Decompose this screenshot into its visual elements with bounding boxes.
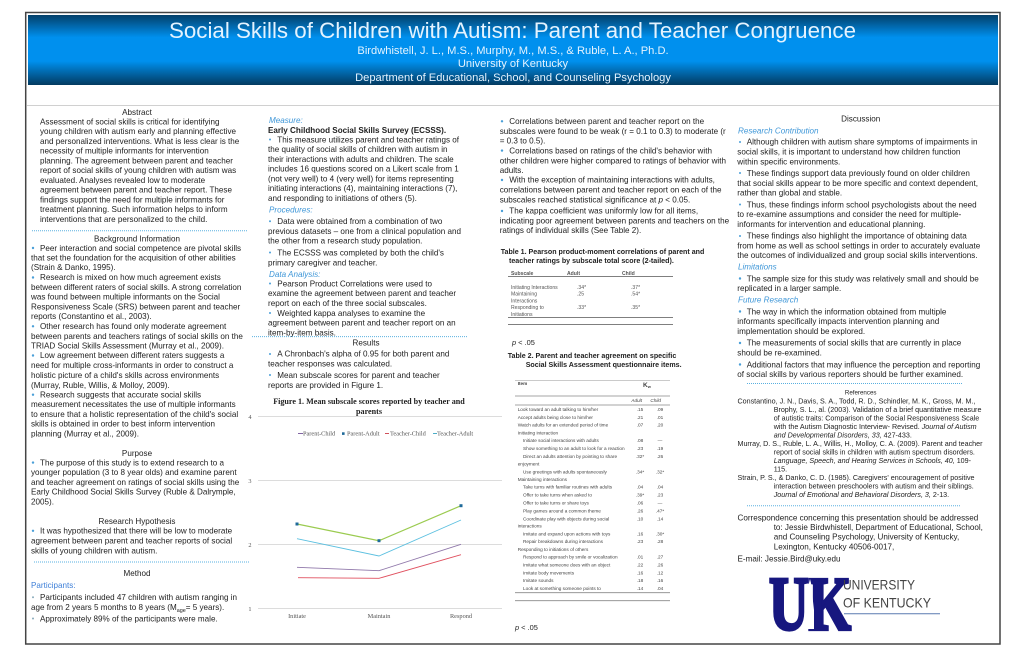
measure name: Early Childhood Social Skills Survey (ECSSS).	[268, 126, 446, 135]
table 2 rows: .19	[657, 446, 664, 451]
results continued: ratings of individual skills (See Table 2).	[500, 226, 641, 235]
hypothesis text: agreement between parent and teacher reports of social	[31, 536, 232, 545]
figure 1 line chart	[248, 397, 502, 620]
table 2 rows: Initiating interaction	[518, 430, 558, 435]
participants text: age from 2 years 5 months to 8 years (M	[31, 603, 177, 612]
table 2 caption	[508, 352, 682, 369]
data analysis text	[268, 279, 456, 337]
logo mark: UK: UK	[769, 563, 851, 647]
reference list: Language, Speech, and Hearing Services in Schools, 40, 109-	[774, 457, 972, 465]
background bullets: between different raters of social skills. A strong correlation	[31, 283, 241, 292]
abstract text: necessity of multiple informants for intervention	[40, 147, 209, 156]
table 2 rows: —	[658, 500, 663, 505]
panel: abstract	[40, 108, 240, 224]
abstract text: planning. The agreement between parent and teacher	[40, 156, 233, 165]
reference list: interaction between preschoolers with autism and their siblings.	[774, 482, 974, 490]
abstract text: and personalized interventions. What is less clear is the	[40, 137, 240, 146]
legend: Teacher-Child	[390, 430, 427, 438]
results continued: The kappa coefficient was uniformly low for all items,	[509, 207, 698, 216]
table 2 rows: Offer to take turns when asked to	[523, 492, 592, 497]
table 2 rows: Look at something someone points to	[523, 586, 601, 591]
table 2 rows: .04	[637, 485, 644, 490]
panel: method	[31, 569, 237, 623]
table 2 rows: Imitate and expand upon actions with toys	[523, 531, 611, 536]
table 2 rows: .23	[637, 446, 644, 451]
table 2: K	[643, 382, 648, 389]
results continued: Correlations based on ratings of the child's behavior with	[509, 146, 712, 155]
logo wordmark: UNIVERSITY	[843, 576, 916, 592]
contribution text: from home as well as school settings in order to accurately evaluate	[737, 241, 981, 250]
future research text: Additional factors that may influence the perception and reporting	[747, 360, 980, 369]
results text: A Chronbach's alpha of 0.95 for both parent and	[277, 350, 449, 359]
reference list: with the Autism Diagnostic Interview- Revised. Journal of Autism	[773, 423, 977, 431]
measure text: their interactions with adults and children. The scale	[268, 155, 454, 164]
table 1: Maintaining	[511, 292, 537, 298]
table 2 rows: .01	[637, 555, 644, 560]
heading: purpose: Purpose	[122, 449, 153, 458]
reference list: Brophy, S. L., al. (2003). Validation of a brief quantitative measure	[774, 406, 981, 414]
subheading: future research: Future Research	[738, 296, 799, 305]
background bullets: between parents and teachers ratings of social skills on the	[31, 332, 243, 341]
table 1: Initiating Interactions	[511, 285, 558, 291]
table 2 rows: interactions	[518, 524, 542, 529]
subheading: research contribution: Research Contribution	[738, 126, 819, 135]
table 2 rows: .47*	[656, 508, 664, 513]
subheading: data analysis: Data Analysis:	[269, 270, 320, 279]
background bullets: need for multiple cross-informants in order to construct a	[31, 361, 234, 370]
table 2 note: p < .05	[514, 623, 538, 632]
purpose text: and teacher agreement on ratings of social skills using the	[31, 478, 240, 487]
panel: correspondence: E-mail: Jessie.Bird@uky.edu	[738, 554, 840, 563]
reference list: Strain, P. S., & Danko, C. D. (1985). Caregivers' encouragement of positive	[738, 474, 975, 482]
table 1: Responding to	[511, 305, 544, 311]
table 2 rows: Look toward an adult talking to him/her	[518, 407, 599, 412]
table 2 rows: .16	[657, 578, 664, 583]
table 2 rows: .26	[657, 563, 664, 568]
results text	[268, 350, 449, 390]
table 1: .37*	[631, 285, 640, 291]
purpose text: The purpose of this study is to extend research to a	[40, 458, 225, 467]
panel: results	[268, 338, 449, 390]
contribution text: to re-examine assumptions and consider the need for multiple-	[737, 210, 962, 219]
table 2 rows	[518, 407, 664, 591]
participants text: Participants included 47 children with autism ranging in	[40, 593, 237, 602]
results continued: adults.	[500, 166, 524, 175]
background bullets: Research is mixed on how much agreement exists	[40, 273, 221, 282]
purpose text: 2005).	[31, 497, 54, 506]
background bullets	[30, 244, 243, 438]
chart title: Figure 1. Mean subscale scores reported by teacher and	[273, 397, 465, 406]
table 1: Child	[622, 271, 635, 277]
contribution text: informants for intervention and educational planning.	[737, 220, 925, 229]
table 2 rows: .26	[637, 508, 644, 513]
background bullets: Other research has found only moderate agreement	[40, 322, 227, 331]
contribution text: the outcomes of individualized and group social skills interventions.	[737, 251, 978, 260]
table 2 rows: Play games around a common theme	[523, 508, 601, 513]
participants text	[31, 593, 237, 623]
future research text: The measurements of social skills that are currently in place	[747, 339, 962, 348]
future research text: informants specifically impacts intervention planning and	[737, 317, 939, 326]
table 2 rows: .34*	[636, 469, 644, 474]
results continued: other children were higher compared to ratings of behavior with	[500, 156, 726, 165]
table 2 rows: .23	[637, 539, 644, 544]
contribution text: that social skills appear to be more specific and context dependent,	[737, 179, 978, 188]
table 2: Item	[518, 381, 527, 386]
participants text: = 5 years).	[186, 603, 224, 612]
table 2 rows: .39*	[636, 492, 644, 497]
background bullets: Research suggests that accurate social skills	[40, 390, 201, 399]
measure text: (not very well) to 4 (very well) for items representing	[268, 174, 454, 183]
table 1: .34*	[577, 285, 586, 291]
panel: background information	[30, 234, 243, 438]
table 2 rows: .32*	[656, 469, 664, 474]
subheading: participants: Participants:	[31, 581, 76, 590]
table 1: .54*	[631, 292, 640, 298]
reference list: Murray, D. S., Ruble, L. A., Willis, H., Molloy, C. A. (2009). Parent and teacher	[738, 440, 983, 448]
panel: correspondence: to: Jessie Birdwhistell, Department of Educational, School,	[774, 523, 983, 532]
table 2 rows: Repair breakdowns during interactions	[523, 539, 604, 544]
subheading: measure: Measure:	[269, 116, 303, 125]
data analysis text: Pearson Product Correlations were used to	[277, 279, 433, 288]
table 2 rows: Take turns with familiar routines with adults	[523, 485, 613, 490]
series: teacher-adult	[297, 520, 461, 556]
header banner	[28, 15, 998, 85]
abstract text: findings support the need for multiple informants for	[40, 195, 225, 204]
data analysis text: Weighted kappa analyses to examine the	[277, 309, 426, 318]
heading: hypothesis: Research Hypothesis	[99, 517, 175, 526]
contribution text: Thus, these findings inform school psychologists about the need	[747, 200, 977, 209]
table 2 rows: Accept adults being close to him/her	[518, 415, 593, 420]
table 2 rows: .22	[637, 563, 644, 568]
table 2 rows: .18	[637, 578, 644, 583]
heading: references: References	[845, 390, 877, 397]
chart title: parents	[356, 407, 382, 416]
results continued: correlations between parent and teacher report on each of the	[500, 185, 722, 194]
subheading: procedures: Procedures:	[269, 206, 313, 215]
limitations text: The sample size for this study was relatively small and should be	[747, 274, 979, 283]
procedures text: the other from a research study population.	[268, 237, 422, 246]
panel: correspondence: and Counseling Psychology, University of Kentucky,	[774, 533, 959, 542]
heading: background: Background Information	[94, 234, 180, 243]
table 1	[501, 248, 704, 347]
background bullets: that set the foundation for the acquisition of other abilities	[31, 254, 236, 262]
table 2 rows: .12	[657, 570, 664, 575]
future research text: The way in which the information obtained from multiple	[747, 307, 947, 316]
data analysis text: examine the agreement between parent and teacher	[268, 289, 456, 298]
series: teacher-child	[298, 555, 461, 578]
table 2 rows: Coordinate play with objects during social	[523, 516, 609, 521]
background bullets: (Strain & Danko, 1995).	[31, 263, 116, 272]
abstract text: treatment planning. Such information helps to inform	[40, 205, 228, 214]
heading: discussion: Discussion	[841, 114, 880, 123]
table 2 rows: .32*	[636, 454, 644, 459]
legend: Teacher-Adult	[437, 430, 473, 438]
table 1: Subscale	[511, 271, 534, 277]
panel: references	[738, 390, 983, 499]
table 2 rows: Responding to initiations of others	[518, 547, 589, 552]
table 2 rows: .23	[657, 492, 664, 497]
background bullets: planning (Murray et al., 2009).	[31, 429, 139, 438]
table 2	[508, 352, 682, 632]
reference list: and Developmental Disorders, 33, 427-433.	[774, 431, 912, 439]
background bullets: Peer interaction and social competence are pivotal skills	[40, 244, 241, 253]
logo wordmark	[843, 576, 932, 610]
y axis labels	[248, 414, 252, 613]
background bullets: Responsiveness Scale (SRS) between parent and teacher	[31, 302, 241, 311]
reference list: of autistic traits: Comparison of the Social Responsiveness Scale	[774, 414, 979, 422]
measure text: includes 16 questions scored on a Likert scale from 1	[268, 165, 459, 174]
table 1: .33*	[577, 305, 586, 311]
table 2 rows: Direct an adults attention by pointing to share	[523, 454, 617, 459]
procedures text: Data were obtained from a combination of two	[277, 217, 443, 226]
background bullets: skills is obtained in order to best inform intervention	[31, 420, 215, 428]
measure text: initiating interactions (4), maintaining interactions (7),	[268, 184, 457, 193]
table 2 rows: Show something to an adult to look for a reaction	[523, 446, 625, 451]
results continued: subscales reached statistical significance at p < 0.05.	[500, 195, 690, 204]
purpose text: Early Childhood Social Skills Survey (Ruble & Dalrymple,	[31, 488, 236, 497]
results continued: subscales were found to be weak (r = 0.1 to 0.3) to moderate (r	[500, 127, 726, 136]
table 2 rows: Initiate social interactions with adults	[523, 438, 599, 443]
background bullets: was found between multiple informants on the Social	[30, 293, 220, 302]
table 2 rows: .27	[657, 555, 664, 560]
reference list: Constantino, J. N., Davis, S. A., Todd, R. D., Schindler, M. K., Gross, M. M.,	[738, 397, 975, 405]
contribution text	[736, 138, 981, 260]
background bullets: reports (Constantino et al., 2003).	[31, 312, 152, 321]
table 1 note: p < .05	[511, 338, 535, 347]
table 2 caption: Social Skills Assessment questionnaire items.	[526, 361, 682, 369]
heading: results: Results	[352, 338, 380, 347]
background bullets: Low agreement between different raters suggests a	[40, 351, 225, 360]
data analysis text: item-by-item basis.	[268, 328, 336, 337]
chart title	[273, 397, 465, 416]
contribution text: within specific environments.	[736, 157, 840, 166]
contribution text: rather than global and stable.	[737, 189, 842, 198]
results continued	[500, 117, 730, 235]
procedures text: previous datasets – one from a clinical population and	[268, 227, 461, 236]
limitations text: replicated in a larger sample.	[737, 284, 841, 293]
data analysis text: report on each of the three social subscales.	[268, 299, 427, 308]
x axis labels: Respond	[450, 613, 473, 620]
table 2 rows: .04	[657, 485, 664, 490]
heading: abstract: Abstract	[122, 108, 153, 117]
table 2 rows: .15	[637, 407, 644, 412]
limitations text	[737, 274, 979, 293]
future research text: of social skills by various reporters should be further examined.	[737, 370, 963, 379]
measure text: This measure utilizes parent and teacher ratings of	[277, 135, 460, 144]
abstract text: young children with autism early and planning effective	[40, 127, 237, 136]
title: Social Skills of Children with Autism: Parent and Teacher Congruence	[169, 18, 856, 43]
table 2 rows: Imitate what someone does with an object	[523, 563, 611, 568]
future research text: implementation should be explored.	[737, 327, 865, 336]
abstract text: report of social skills of young children with autism was	[40, 166, 236, 175]
x axis labels	[288, 613, 473, 620]
panel: measure	[268, 116, 461, 337]
subheading: limitations: Limitations	[738, 263, 777, 272]
contribution text: social skills, it is important to understand how children function	[737, 148, 960, 157]
results text: teacher responses was calculated.	[268, 359, 392, 368]
table 2 rows: .07	[637, 423, 644, 428]
procedures text: The ECSSS was completed by both the child's	[277, 248, 444, 257]
purpose text	[31, 458, 240, 506]
participants text: Approximately 89% of the participants were male.	[40, 614, 218, 623]
results continued: = 0.3 to 0.5).	[500, 137, 545, 146]
table 2: Child	[650, 398, 661, 403]
purpose text: younger population (3 to 8 year olds) and examine parent	[31, 468, 237, 477]
table 2 rows: .20	[657, 423, 664, 428]
data analysis text: agreement between parent and teacher report on an	[268, 319, 456, 328]
y axis labels: 4	[248, 414, 252, 421]
reference list: Journal of Emotional and Behavioral Disorders, 3, 2-13.	[773, 491, 949, 499]
table 2 rows: .16	[637, 570, 644, 575]
table 2 rows: .28	[657, 539, 664, 544]
abstract text: evaluated. Analyses revealed low to moderate	[40, 176, 206, 185]
table 2 rows: Use greetings with adults spontaneously	[523, 469, 608, 474]
results text: reports are provided in Figure 1.	[268, 381, 383, 390]
series: parent-child	[297, 544, 461, 571]
logo: University of Kentucky	[769, 563, 940, 647]
table 1: .35*	[631, 305, 640, 311]
background bullets: TRIAD Social Skills Assessment (Murray et al., 2009).	[31, 342, 224, 350]
department: Department of Educational, School, and Counseling Psychology	[355, 72, 671, 84]
procedures text	[268, 217, 461, 267]
panel: correspondence	[738, 513, 983, 563]
contribution text: Although children with autism share symptoms of impairments in	[747, 138, 977, 147]
table 2 rows: enjoyment	[518, 461, 540, 466]
measure text: and responding to initiations of others (5).	[268, 194, 417, 203]
future research text: should be re-examined.	[737, 349, 822, 358]
hypothesis text: skills of young children with autism.	[31, 546, 157, 555]
table 1 caption	[501, 248, 704, 265]
table 2 rows: .08	[637, 438, 644, 443]
table 2 rows: .14	[637, 586, 644, 591]
legend	[298, 430, 473, 438]
results continued: indicating poor agreement between parents and teachers on the	[500, 216, 730, 225]
table 2 rows: .10	[637, 516, 644, 521]
reference list: report of social skills in children with autism spectrum disorders.	[774, 448, 975, 456]
table 2 rows: Imitate sounds	[523, 578, 554, 583]
background bullets: holistic picture of a child's skills across environments	[31, 371, 219, 380]
authors: Birdwhistell, J. L., M.S., Murphy, M., M.S., & Ruble, L. A., Ph.D.	[357, 45, 669, 57]
background bullets: (Murray, Ruble, Willis, & Molloy, 2009).	[31, 381, 170, 390]
table 2 rows: .30*	[656, 531, 664, 536]
table 2 rows: Respond to approach by smile or vocalization	[523, 555, 618, 560]
reference list	[738, 397, 983, 499]
abstract text: interventions that are personalized to the child.	[40, 215, 207, 224]
table 2: Adult	[630, 398, 643, 403]
measure text: the quality of social skills of children with autism in	[268, 145, 448, 154]
results continued: With the exception of maintaining interactions with adults,	[509, 176, 715, 185]
table 1: Adult	[567, 271, 580, 277]
y axis labels: 3	[248, 478, 252, 485]
panel: correspondence: Correspondence concerning this presentation should be addressed	[738, 513, 978, 522]
hypothesis text	[31, 527, 233, 555]
panel: correspondence: Lexington, Kentucky 40506-0017,	[774, 543, 894, 552]
future research text	[737, 307, 980, 379]
table 2 rows: Imitate body movements	[523, 570, 575, 575]
results text: Mean subscale scores for parent and teacher	[277, 371, 440, 380]
table 1: Initiations	[511, 312, 533, 318]
abstract text: agreement between parent and teacher report. These	[40, 186, 232, 195]
legend: Parent-Child	[303, 430, 336, 438]
table 2 caption: Table 2. Parent and teacher agreement on specific	[508, 352, 676, 360]
procedures text: primary caregiver and teacher.	[268, 258, 377, 267]
y axis labels: 1	[248, 606, 252, 613]
reference list: 115.	[774, 465, 787, 473]
results continued: Correlations between parent and teacher report on the	[509, 117, 705, 126]
table 1 caption: Table 1. Pearson product-moment correlations of parent and	[501, 248, 704, 256]
x axis labels: Maintain	[368, 613, 391, 620]
y axis labels: 2	[248, 542, 252, 549]
table 2 rows: .16	[637, 531, 644, 536]
table 2 rows: .06	[637, 500, 644, 505]
table 2 rows: .26	[657, 454, 664, 459]
table 2: w	[647, 384, 652, 389]
hypothesis text: It was hypothesized that there will be low to moderate	[40, 527, 233, 536]
contribution text: These findings support data previously found on older children	[747, 169, 970, 178]
table 1: Interactions	[511, 298, 538, 304]
table 2 rows: .14	[657, 516, 664, 521]
x axis labels: Initiate	[288, 613, 306, 620]
table 2 rows: —	[658, 438, 663, 443]
legend: Parent-Adult	[347, 430, 380, 438]
participants text: age	[177, 608, 186, 614]
table 2 rows: .04	[657, 586, 664, 591]
table 2 rows: .01	[657, 415, 664, 420]
abstract text: Assessment of social skills is critical for identifying	[40, 118, 219, 126]
table 2 rows: Maintaining interactions	[518, 477, 568, 482]
table 2 rows: Watch adults for an extended period of time	[518, 423, 609, 428]
background bullets: measurement necessitates the use of multiple informants	[31, 400, 236, 409]
table 1 caption: teacher ratings by subscale total score (2-tailed).	[509, 257, 674, 265]
panel: purpose	[31, 449, 240, 506]
panel: discussion	[736, 114, 981, 379]
series: parent-adult	[296, 504, 462, 542]
table 2 rows: .09	[657, 407, 664, 412]
logo wordmark: OF KENTUCKY	[843, 594, 932, 610]
measure text	[268, 135, 460, 203]
panel: research hypothesis	[31, 517, 233, 555]
table 2 rows: Offer to take turns or share toys	[523, 500, 589, 505]
table 1: .25	[577, 292, 584, 298]
background bullets: to ensure that a holistic representation of the child's social	[31, 410, 238, 419]
heading: method: Method	[124, 569, 150, 578]
contribution text: These findings also highlight the importance of obtaining data	[747, 232, 967, 241]
university: University of Kentucky	[458, 58, 569, 70]
table 2 rows: .21	[637, 415, 644, 420]
abstract text	[40, 118, 240, 224]
